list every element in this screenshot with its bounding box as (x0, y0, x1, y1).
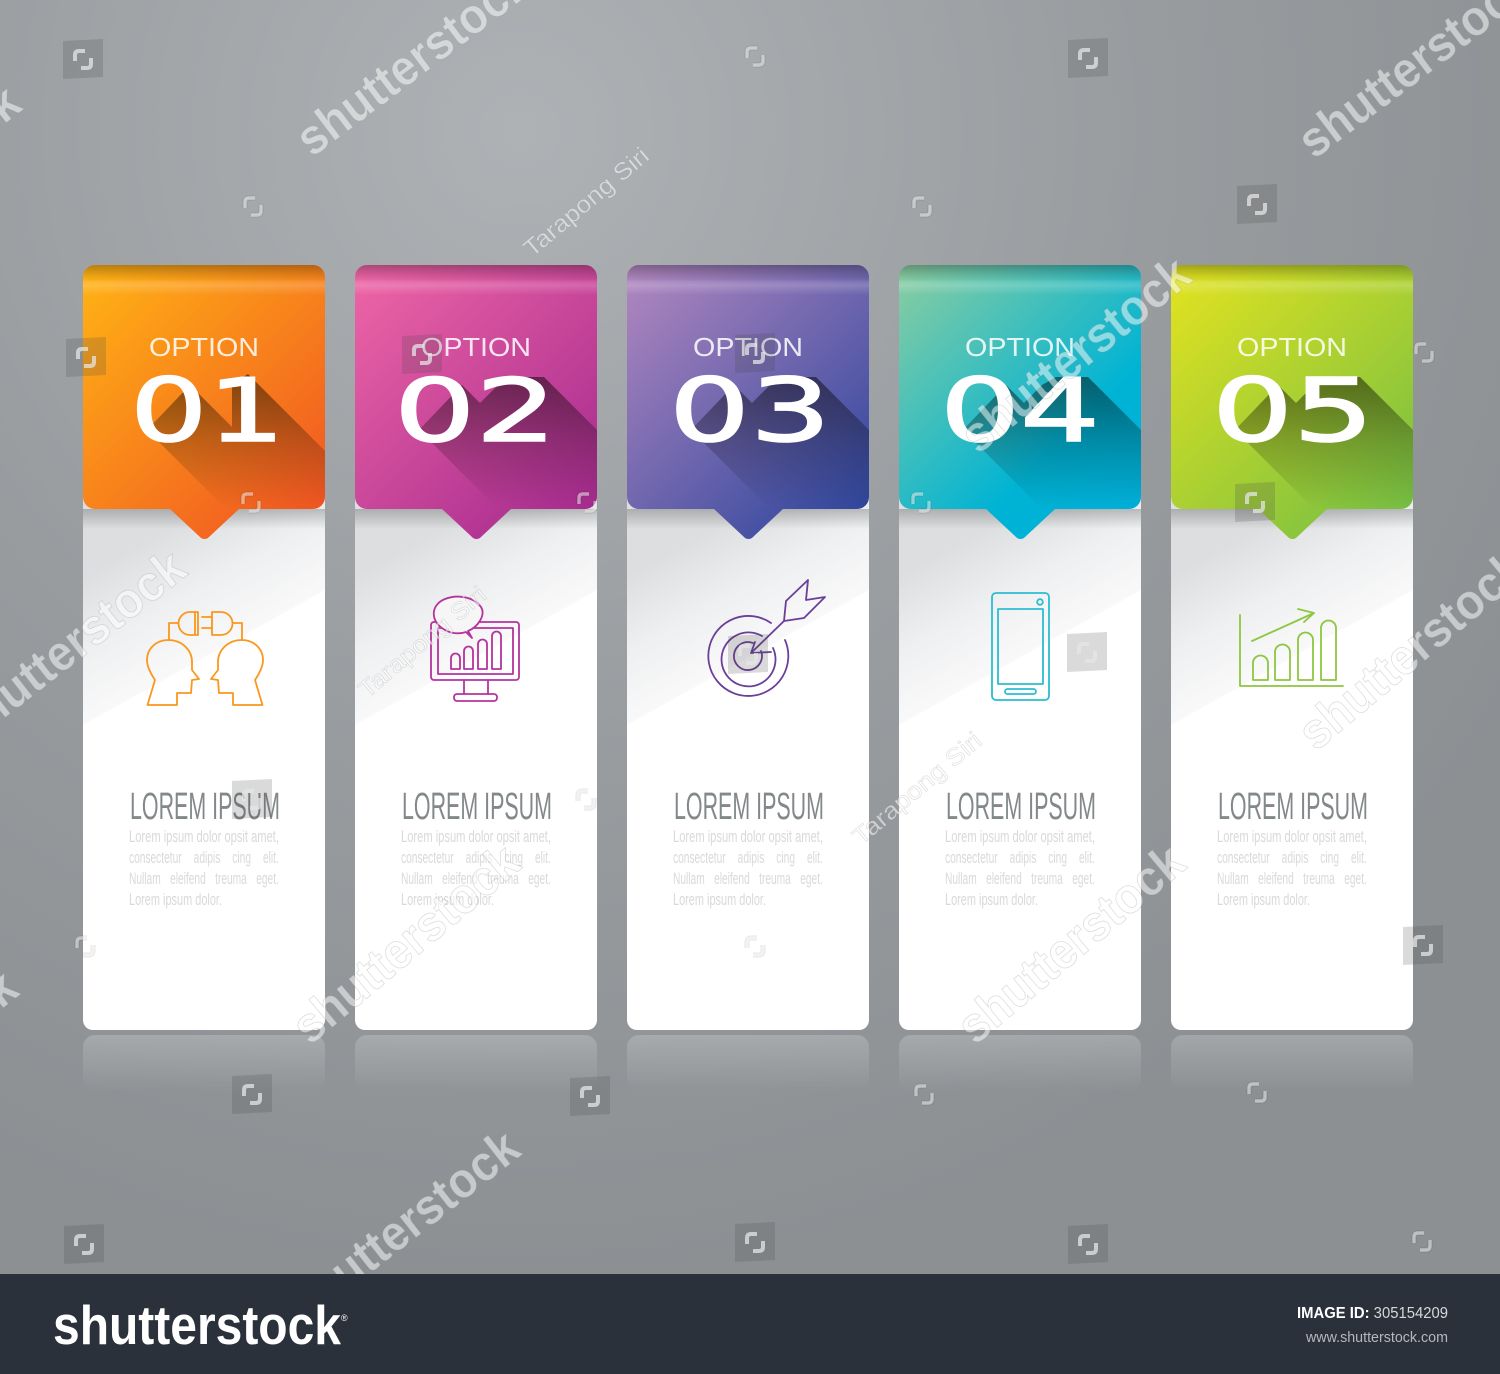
card 3 tag shadow (627, 509, 869, 529)
card 3 purple tag (627, 265, 869, 545)
icon: rising bar chart (1240, 609, 1343, 686)
card 1 tag shadow (83, 509, 325, 529)
card 3: option 03 (627, 265, 869, 1091)
card 5: option 05 (1171, 265, 1413, 1091)
shutterstock watermark text: shutterstock (950, 245, 1201, 464)
card 5 number: 05 (1212, 360, 1374, 462)
card 4 option label: OPTION (965, 332, 1075, 362)
footer logo: shutterstock (53, 1294, 341, 1356)
card 1: option 01 (83, 265, 325, 1091)
card 4 grey sheen (899, 500, 1141, 725)
shutterstock watermark text: shutterstock (946, 833, 1195, 1054)
card 5 body text: consectetur adipis cing elit. (1217, 847, 1367, 867)
card 2 white panel (355, 400, 597, 1030)
card 5 reflection (1171, 1035, 1413, 1091)
card 4 body text: Lorem ipsum dolor opsit amet, (945, 827, 1095, 846)
card 1 body text: Lorem ipsum dolor opsit amet, (129, 827, 279, 846)
photographer watermark text: Tarapong Siri (848, 727, 987, 851)
card 1 body text: Lorem ipsum dolor. (129, 890, 222, 909)
card 2 body text: Lorem ipsum dolor opsit amet, (401, 827, 551, 846)
footer bar (0, 1274, 1500, 1374)
card 1 white panel (83, 400, 325, 1030)
photographer watermark text (354, 142, 987, 851)
card 4 body text: Lorem ipsum dolor. (945, 890, 1038, 909)
card 4 reflection (899, 1035, 1141, 1091)
card 4 teal tag (899, 265, 1141, 545)
icon: smartphone (992, 593, 1049, 700)
footer image id: IMAGE ID: 305154209 (1297, 1305, 1448, 1322)
card 3 body text: consectetur adipis cing elit. (673, 847, 823, 867)
card 4 tag shadow (899, 509, 1141, 529)
card 4 number: 04 (940, 360, 1100, 462)
photographer watermark text: Tarapong Siri (354, 581, 492, 704)
card 1 orange tag (83, 265, 325, 545)
card 5 green tag (1171, 265, 1413, 545)
card 2 heading: LOREM IPSUM (402, 786, 552, 828)
card 1 body text: consectetur adipis cing elit. (129, 847, 279, 867)
card 5 body text: Lorem ipsum dolor. (1217, 890, 1310, 909)
card 3 body text: Lorem ipsum dolor. (673, 890, 766, 909)
card 3 option label: OPTION (693, 332, 803, 362)
card 5 white panel (1171, 400, 1413, 1030)
card 4 white panel (899, 400, 1141, 1030)
icon: two heads with plug (147, 612, 263, 705)
card 3 body text (673, 827, 823, 909)
card 2: option 02 (355, 265, 597, 1091)
icon: monitor with chart and speech bubble (431, 597, 519, 701)
card 4 body text: consectetur adipis cing elit. (945, 847, 1095, 867)
card 5 tag shadow (1171, 509, 1413, 529)
card 5 option label: OPTION (1237, 332, 1347, 362)
card 5 heading: LOREM IPSUM (1218, 786, 1368, 828)
card 3 body text: Lorem ipsum dolor opsit amet, (673, 827, 823, 846)
card 1 option label: OPTION (149, 332, 259, 362)
shutterstock watermark text: shutterstock (276, 1118, 530, 1334)
shutterstock watermark text: shutterstock (281, 833, 530, 1054)
card 2 tag shadow (355, 509, 597, 529)
card 2 magenta tag (355, 265, 597, 545)
card 2 body text: Nullam eleifend treuma eget. (401, 868, 551, 888)
card 3 number: 03 (669, 360, 831, 462)
card 3 grey sheen (627, 500, 869, 725)
card 4 heading: LOREM IPSUM (946, 786, 1096, 828)
card 5 grey sheen (1171, 500, 1413, 725)
card 2 body text (401, 827, 551, 909)
card 5 body text (1217, 827, 1367, 909)
card 4 body text: Nullam eleifend treuma eget. (945, 868, 1095, 888)
footer website: www.shutterstock.com (1305, 1329, 1448, 1346)
card 2 body text: Lorem ipsum dolor. (401, 890, 494, 909)
icon: target with arrow (708, 580, 825, 696)
card 5 body text: Nullam eleifend treuma eget. (1217, 868, 1367, 888)
card 2 grey sheen (355, 500, 597, 725)
footer registered mark: ® (341, 1313, 348, 1323)
card 1 heading: LOREM IPSUM (130, 786, 280, 828)
photographer watermark text: Tarapong Siri (519, 142, 655, 263)
card 2 reflection (355, 1035, 597, 1091)
card 1 number: 01 (130, 360, 285, 462)
card 2 body text: consectetur adipis cing elit. (401, 847, 551, 867)
card 1 grey sheen (83, 500, 325, 725)
card 3 body text: Nullam eleifend treuma eget. (673, 868, 823, 888)
card 2 option label: OPTION (421, 332, 531, 362)
card 2 number: 02 (394, 360, 557, 462)
card 3 heading: LOREM IPSUM (674, 786, 824, 828)
card 1 reflection (83, 1035, 325, 1091)
card 3 reflection (627, 1035, 869, 1091)
card 5 body text: Lorem ipsum dolor opsit amet, (1217, 827, 1367, 846)
card 3 white panel (627, 400, 869, 1030)
card 1 body text: Nullam eleifend treuma eget. (129, 868, 279, 888)
card 1 body text (129, 827, 279, 909)
card 4: option 04 (899, 265, 1141, 1091)
card 4 body text (945, 827, 1095, 909)
